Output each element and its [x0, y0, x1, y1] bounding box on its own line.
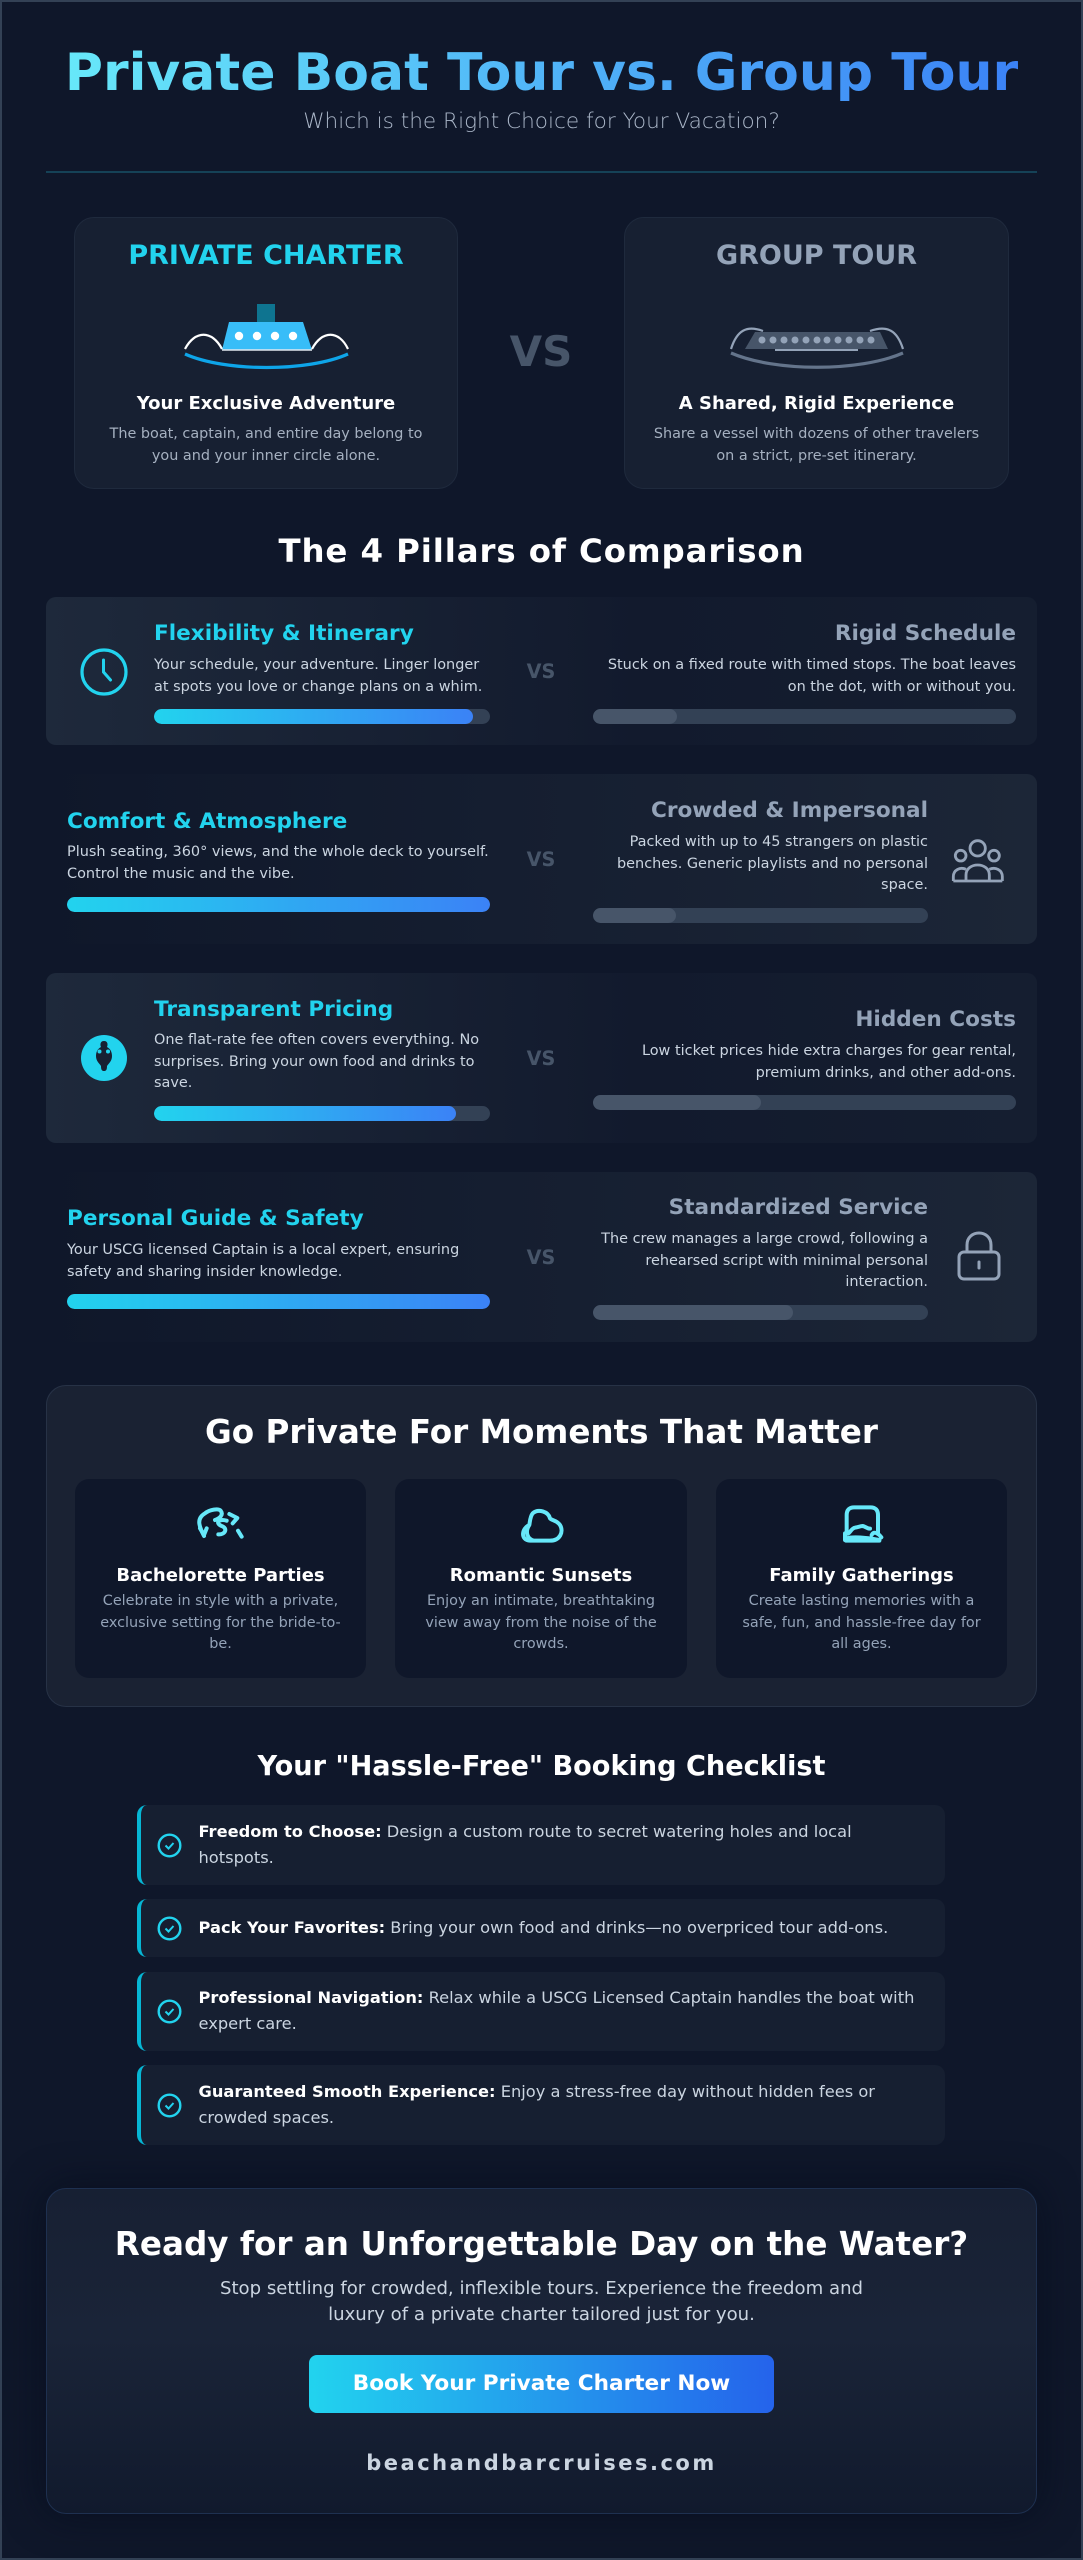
- cta button: Book Your Private Charter Now: [353, 2371, 730, 2396]
- card: sunsets: [395, 1479, 687, 1678]
- website url: beachandbarcruises.com: [366, 2451, 717, 2475]
- icon: group boat: [730, 328, 904, 369]
- checklist text 1: hotspots.: [198, 1848, 274, 1867]
- icon: check 2: [158, 1916, 182, 1940]
- icon: family: [843, 1505, 884, 1543]
- bachelorette title: Bachelorette Parties: [116, 1565, 325, 1586]
- icon: people: [952, 839, 1004, 882]
- icon: cloud: [521, 1508, 564, 1543]
- pillar 2 group text: benches. Generic playlists and no personal: [617, 856, 928, 872]
- pillar 2 vs: VS: [527, 848, 555, 871]
- private charter heading: PRIVATE CHARTER: [128, 240, 404, 271]
- pillar 3 private text: [154, 1032, 479, 1091]
- checklist text 3: [198, 1988, 914, 2033]
- checklist text 1: Freedom to Choose: Design a custom route to secret watering holes and local: [198, 1822, 852, 1841]
- pillar 3 private text: surprises. Bring your own food and drinks to: [154, 1054, 474, 1070]
- bachelorette text: Celebrate in style with a private,: [103, 1593, 338, 1609]
- cta text: luxury of a private charter tailored just for you.: [328, 2304, 755, 2325]
- pillar 4 private text: [67, 1242, 459, 1280]
- icon: padlock: [958, 1232, 1000, 1280]
- panel: pillar 4 guide: [46, 1172, 1037, 1342]
- icon: check 3: [158, 2000, 182, 2024]
- pillar 2 private title: Comfort & Atmosphere: [67, 809, 347, 834]
- pillar 4 group text: rehearsed script with minimal personal: [645, 1253, 928, 1269]
- pillar 3 group bar: [593, 1095, 1016, 1110]
- checklist text 1: [198, 1822, 852, 1867]
- pillar 1 private text: [154, 657, 482, 695]
- sunsets text: Enjoy an intimate, breathtaking: [427, 1593, 655, 1609]
- sunsets text: view away from the noise of the: [425, 1615, 657, 1631]
- subtitle: Which is the Right Choice for Your Vacation?: [303, 109, 780, 134]
- cta text: [220, 2278, 863, 2325]
- checklist text 3: Professional Navigation: Relax while a USCG Licensed Captain handles the boat with: [198, 1988, 914, 2007]
- group tour description: Share a vessel with dozens of other travelers: [654, 426, 979, 442]
- family text: safe, fun, and hassle-free day for: [742, 1615, 981, 1631]
- pillar 4 private text: Your USCG licensed Captain is a local expert, ensuring: [67, 1242, 459, 1258]
- pillar 2 group text: [617, 834, 928, 893]
- icon: clock: [80, 648, 128, 696]
- pillar 3 group text: [642, 1043, 1016, 1081]
- pillar 1 private title: Flexibility & Itinerary: [154, 621, 414, 646]
- checklist text 2: Pack Your Favorites: Bring your own food and drinks—no overpriced tour add-ons.: [198, 1918, 888, 1937]
- icon: price tag coin: [81, 1035, 127, 1081]
- pillar 2 private bar: [67, 897, 490, 912]
- checklist item 3: [137, 1972, 945, 2051]
- checklist text 3: expert care.: [198, 2014, 297, 2033]
- pillar 3 group title: Hidden Costs: [855, 1007, 1016, 1032]
- card: bachelorette: [75, 1479, 366, 1678]
- pillar 4 group bar: [593, 1305, 928, 1320]
- cta text: Stop settling for crowded, inflexible tours. Experience the freedom and: [220, 2278, 863, 2299]
- private charter description: you and your inner circle alone.: [152, 448, 380, 464]
- pillar 4 private text: safety and sharing insider knowledge.: [67, 1264, 342, 1280]
- bachelorette text: exclusive setting for the bride-to-: [100, 1615, 341, 1631]
- pillar 3 private title: Transparent Pricing: [154, 997, 393, 1022]
- icon: private boat: [184, 304, 349, 370]
- panel: group tour: [624, 217, 1009, 489]
- vs badge: VS: [510, 327, 572, 376]
- panel: pillar 1 flexibility: [46, 597, 1037, 745]
- pillar 2 private text: [67, 844, 489, 882]
- panel: pillar 3 pricing: [46, 973, 1037, 1143]
- pillar 1 group text: on the dot, with or without you.: [788, 679, 1016, 695]
- pillar 2 group text: Packed with up to 45 strangers on plastic: [630, 834, 928, 850]
- panel: private charter: [74, 217, 458, 489]
- pillar 3 group text: Low ticket prices hide extra charges for gear rental,: [642, 1043, 1016, 1059]
- pillar 4 group text: The crew manages a large crowd, following a: [601, 1231, 928, 1247]
- icon: party: [197, 1507, 244, 1539]
- heading: pillars: The 4 Pillars of Comparison: [278, 532, 805, 570]
- checklist item 4: [137, 2065, 945, 2145]
- private charter description: The boat, captain, and entire day belong to: [110, 426, 422, 442]
- pillar 4 private bar: [67, 1294, 490, 1309]
- sunsets text: crowds.: [513, 1636, 569, 1652]
- group tour description: [654, 426, 979, 464]
- checklist text 4: [198, 2082, 875, 2127]
- checklist item 2: [137, 1899, 945, 1957]
- pillar 3 private text: One flat-rate fee often covers everything. No: [154, 1032, 479, 1048]
- checklist text 4: crowded spaces.: [198, 2108, 334, 2127]
- family text: Create lasting memories with a: [749, 1593, 974, 1609]
- card: family: [716, 1479, 1007, 1678]
- checklist item 1: [137, 1805, 945, 1885]
- bachelorette text: be.: [209, 1636, 232, 1652]
- pillar 1 group text: [608, 657, 1016, 695]
- panel: pillar 2 comfort: [46, 774, 1037, 944]
- pillar 1 private text: at spots you love or change plans on a whim.: [154, 679, 482, 695]
- pillar 3 private bar: [154, 1106, 490, 1121]
- pillar 1 private bar: [154, 709, 490, 724]
- group tour subheading: A Shared, Rigid Experience: [679, 393, 954, 414]
- private charter subheading: Your Exclusive Adventure: [137, 393, 395, 414]
- family text: [742, 1593, 981, 1652]
- pillar 4 private title: Personal Guide & Safety: [67, 1206, 364, 1231]
- pillar 2 group title: Crowded & Impersonal: [651, 798, 928, 823]
- sunsets title: Romantic Sunsets: [450, 1565, 632, 1586]
- private charter description: [109, 426, 422, 464]
- pillar 2 private text: Plush seating, 360° views, and the whole deck to yourself.: [67, 844, 489, 860]
- cta heading: Ready for an Unforgettable Day on the Water?: [115, 2225, 968, 2263]
- heading: go private: Go Private For Moments That Matter: [205, 1413, 878, 1451]
- pillar 2 private text: Control the music and the vibe.: [67, 866, 295, 882]
- icon: check 1: [158, 1834, 182, 1858]
- pillar 4 group text: [601, 1231, 928, 1290]
- pillar 1 vs: VS: [527, 660, 555, 683]
- group tour heading: GROUP TOUR: [716, 240, 917, 271]
- pillar 4 vs: VS: [527, 1246, 555, 1269]
- pillar 4 group text: interaction.: [845, 1274, 928, 1290]
- title: Private Boat Tour vs. Group Tour: [65, 43, 1018, 103]
- pillar 1 group title: Rigid Schedule: [835, 621, 1016, 646]
- cta button: [309, 2355, 774, 2413]
- panel: call to action: [46, 2188, 1037, 2514]
- heading: checklist: Your "Hassle-Free" Booking Checklist: [257, 1751, 826, 1782]
- pillar 1 group text: Stuck on a fixed route with timed stops. The boat leaves: [608, 657, 1016, 673]
- pillar 2 group bar: [593, 908, 928, 923]
- pillar 1 group bar: [593, 709, 1016, 724]
- panel: go private: [46, 1385, 1037, 1707]
- sunsets text: [425, 1593, 657, 1652]
- group tour description: on a strict, pre-set itinerary.: [716, 448, 917, 464]
- family text: all ages.: [831, 1636, 892, 1652]
- pillar 2 group text: space.: [881, 877, 928, 893]
- icon: check 4: [158, 2094, 182, 2118]
- pillar 3 group text: premium drinks, and other add-ons.: [756, 1065, 1016, 1081]
- checklist text 4: Guaranteed Smooth Experience: Enjoy a stress-free day without hidden fees or: [198, 2082, 875, 2101]
- pillar 3 vs: VS: [527, 1047, 555, 1070]
- family title: Family Gatherings: [769, 1565, 954, 1586]
- bachelorette text: [100, 1593, 341, 1652]
- pillar 1 private text: Your schedule, your adventure. Linger longer: [154, 657, 479, 673]
- pillar 4 group title: Standardized Service: [669, 1195, 928, 1220]
- pillar 3 private text: save.: [154, 1075, 192, 1091]
